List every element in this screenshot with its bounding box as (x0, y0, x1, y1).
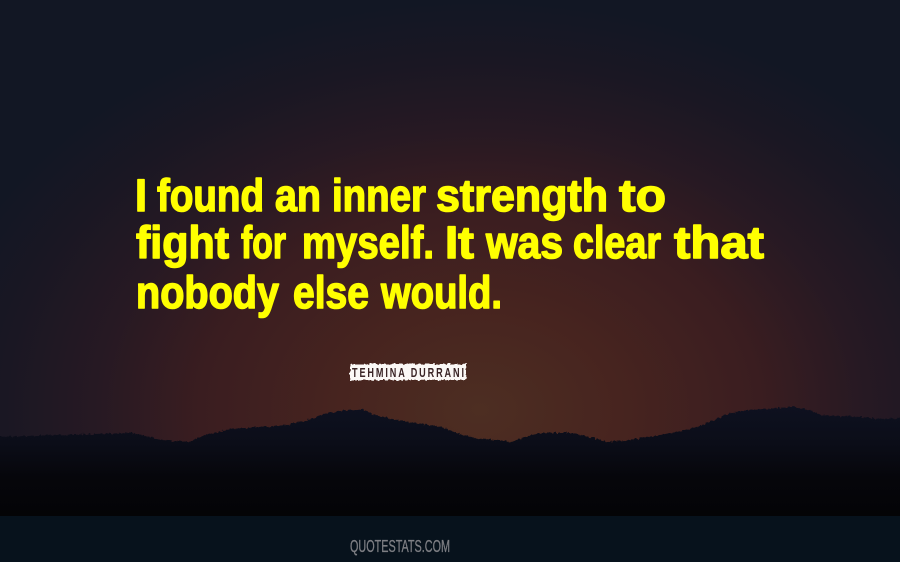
author stamp: TEHMINA DURRANI (352, 367, 464, 380)
line 2: was (485, 217, 563, 268)
water band (0, 516, 900, 562)
line 2: myself. (302, 217, 434, 268)
line 3: nobody (136, 267, 279, 318)
line 3 (136, 267, 502, 318)
line 3: else (293, 267, 369, 318)
line 1: an (275, 170, 321, 221)
line 1: inner (332, 170, 426, 221)
quote text (135, 170, 764, 318)
line 1: I (135, 170, 147, 221)
line 2: clear (573, 217, 661, 268)
line 1 (135, 170, 666, 221)
watermark: QUOTESTATS.COM (350, 536, 450, 556)
line 1: strength (436, 170, 608, 221)
line 1: found (157, 170, 264, 221)
line 2 (136, 217, 764, 268)
line 2: that (674, 217, 764, 268)
line 2: for (241, 217, 286, 268)
line 2: fight (136, 217, 229, 268)
line 2: It (445, 217, 474, 268)
mountain silhouette (0, 407, 900, 518)
line 1: to (619, 170, 666, 221)
line 3: would. (380, 267, 502, 318)
